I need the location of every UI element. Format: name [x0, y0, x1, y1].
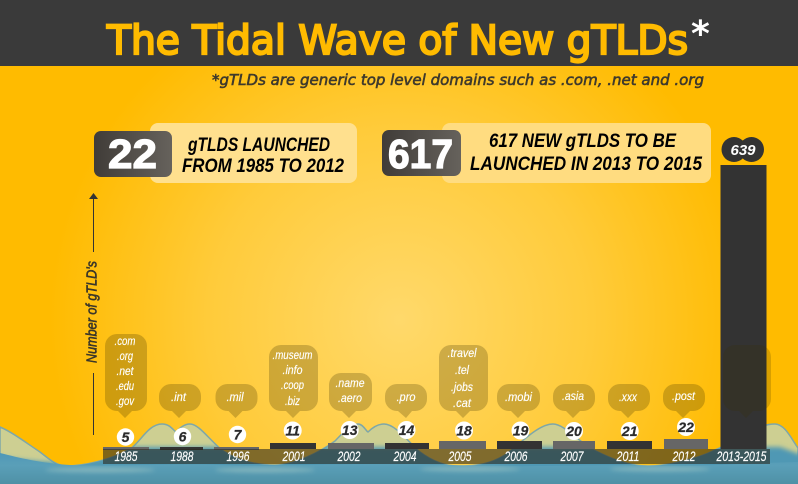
- bubble: 1985: .gov: [116, 394, 135, 408]
- year strip: 2012: [672, 449, 696, 464]
- callout: 617 new: 617 NEW gTLDS TO BE: [489, 131, 677, 152]
- year strip: 1996: [226, 449, 250, 464]
- total badge: 639: 639: [730, 142, 756, 159]
- callout: 617 new: [382, 123, 711, 183]
- bubble: 2005: .cat: [453, 396, 472, 410]
- title asterisk: *: [691, 14, 710, 55]
- bubble: 2001: .coop: [281, 378, 304, 392]
- year strip: 2001: [282, 449, 306, 464]
- bubble: 2002: .name: [336, 376, 365, 390]
- year strip: 2011: [616, 449, 640, 464]
- bubble: 2007: .asia: [562, 389, 584, 403]
- bubble: 2005: .travel: [448, 346, 477, 360]
- bubble: 2012: [663, 384, 705, 418]
- y axis label and arrow: [84, 193, 100, 435]
- bubble: 2005: [439, 345, 488, 418]
- total badge: 639: [722, 137, 764, 162]
- bubble: 1985: .net: [116, 364, 134, 378]
- bar: 2002: [328, 443, 374, 449]
- bubble: 1985: [105, 334, 147, 418]
- value badges: 7: [234, 426, 243, 442]
- bubble: 2001: .info: [282, 363, 303, 377]
- bubble: 2011: .xxx: [619, 390, 638, 404]
- value badges: 22: [677, 419, 694, 435]
- title: The Tidal Wave of New gTLDs: [106, 18, 688, 64]
- value badges: 21: [621, 423, 638, 439]
- bubble: 2013-2015: [723, 345, 771, 418]
- bubble: 2001: [269, 345, 318, 418]
- year strip: 2002: [337, 449, 361, 464]
- year strip: 2004: [393, 449, 416, 464]
- bar: 1996: [214, 447, 259, 450]
- value badges: 14: [399, 422, 414, 438]
- bar: 2005: [439, 441, 486, 449]
- value badges: 5: [122, 429, 130, 445]
- bubbles: [105, 334, 771, 418]
- bar: 2007: [553, 441, 595, 449]
- bubble: 2002: [329, 373, 372, 418]
- bubble: 2006: .mobi: [505, 390, 532, 404]
- bubble: 2007: [553, 384, 595, 418]
- bar: 1985: [103, 447, 149, 450]
- bubble: 1985: .org: [117, 349, 133, 363]
- bubble: 2011: [608, 384, 650, 418]
- value badges: 20: [565, 423, 582, 439]
- callout: 617 new: 617: [388, 131, 453, 177]
- bubble: 2004: .pro: [396, 390, 416, 404]
- bubble: 2012: .post: [672, 389, 696, 403]
- year strip: 2013-2015: [716, 449, 767, 464]
- year strip: 1985: [114, 449, 138, 464]
- bubble: 1985: .com: [114, 334, 136, 348]
- bar: 2001: [270, 443, 316, 449]
- bubble: 2002: .aero: [338, 391, 362, 405]
- subtitle footnote: *gTLDs are generic top level domains such as .com, .net and .org: [212, 71, 704, 89]
- callout: 617 new: LAUNCHED IN 2013 TO 2015: [470, 154, 702, 175]
- value badges: 11: [285, 422, 300, 438]
- bar: 2012: [664, 439, 708, 449]
- value badges: [117, 418, 695, 446]
- bubble: 2006: [497, 384, 540, 418]
- y axis label and arrow: Number of gTLD's: [84, 261, 100, 363]
- value badges: 18: [456, 422, 472, 438]
- callout: 22 launched: 22: [108, 131, 157, 177]
- bubble: 2001: .biz: [285, 394, 300, 408]
- bubble: 2005: .jobs: [451, 380, 473, 394]
- bubble: 1996: .mil: [226, 390, 244, 404]
- value badges: 19: [513, 422, 528, 438]
- bar chart: [103, 165, 766, 450]
- callout: 22 launched: [94, 123, 357, 183]
- callout: 22 launched: FROM 1985 TO 2012: [182, 156, 344, 177]
- year strip: 2005: [448, 449, 472, 464]
- year strip: [103, 449, 770, 464]
- year strip: 2007: [560, 449, 584, 464]
- bar: 1988: [160, 447, 203, 450]
- callout: 22 launched: gTLDS LAUNCHED: [187, 135, 330, 156]
- year strip: 2006: [504, 449, 528, 464]
- bar: 2013-2015: [720, 165, 766, 449]
- year strip: 1988: [170, 449, 194, 464]
- header band: [0, 0, 798, 66]
- bubble: 1988: [159, 384, 201, 418]
- bar: 2011: [607, 441, 652, 449]
- value badges: 6: [179, 428, 187, 444]
- bubble: 2001: .museum: [272, 348, 312, 362]
- bubble: 1988: .int: [171, 390, 187, 404]
- bubble: 1985: .edu: [116, 379, 134, 393]
- value badges: 13: [342, 422, 358, 438]
- bubble: 2005: .tel: [455, 363, 469, 377]
- bubble: 1996: [216, 384, 258, 418]
- bar: 2006: [497, 441, 542, 449]
- wave humps: [0, 423, 798, 466]
- bar: 2004: [385, 443, 429, 449]
- water: [0, 453, 798, 484]
- bubble: 2004: [385, 384, 427, 418]
